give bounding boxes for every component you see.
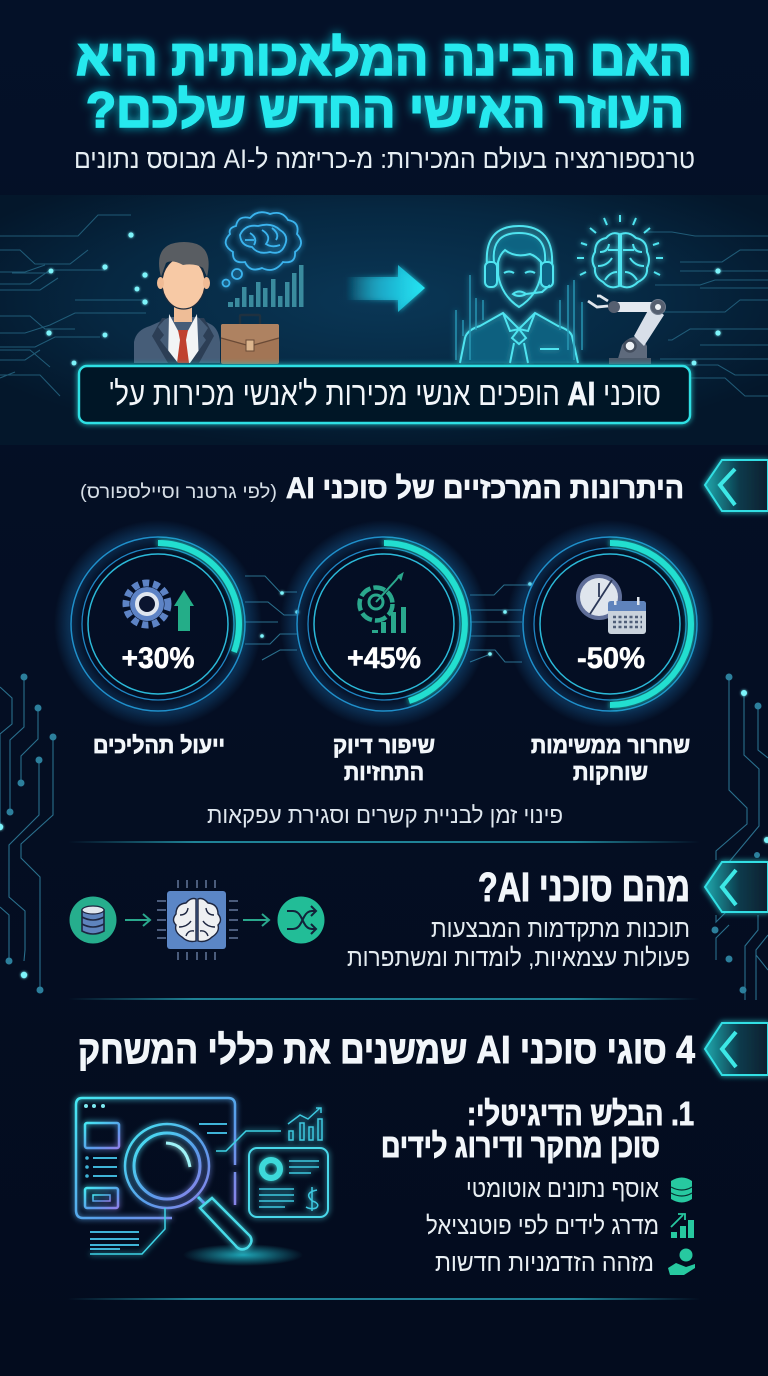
bullet: ranks leads by potential: מדרג לידים לפי פוטנציאל — [426, 1212, 659, 1240]
icon: gear with up arrow — [126, 583, 194, 631]
panel: hero transformation — [0, 195, 768, 445]
stat label: ייעול תהליכים — [93, 732, 225, 758]
callout: agents turn salespeople into super salespeople — [79, 366, 690, 423]
divider — [68, 1298, 700, 1300]
connectors between circles — [245, 576, 532, 662]
title — [76, 30, 692, 138]
panel: what are AI agents — [70, 862, 768, 972]
icon: clock and calendar — [576, 574, 646, 634]
icon: hexagon badge advantages — [705, 460, 768, 511]
heading: main advantages: היתרונות המרכזיים של סוכני AI — [286, 472, 684, 505]
icon: hexagon badge what — [705, 862, 768, 912]
panel: stat +30% process optimization — [54, 520, 262, 758]
heading: agent name — [381, 1095, 694, 1164]
heading: agent name: 1. הבלש הדיגיטלי: — [467, 1095, 694, 1132]
right circuit decoration — [712, 674, 768, 1000]
heading: main advantages: (לפי גרטנר וסיילספורס) — [80, 482, 277, 503]
gauge ring 45 — [280, 520, 488, 728]
callout: agents turn salespeople into super salespeople: סוכני AI הופכים אנשי מכירות ל'אנשי מכירות על' — [109, 375, 661, 412]
gauge ring 50 — [506, 520, 714, 728]
chart: thought bar chart — [228, 265, 304, 307]
icon: shuffle circle — [278, 896, 324, 944]
stat label — [531, 732, 690, 785]
heading: agent name: סוכן מחקר ודירוג לידים — [381, 1127, 660, 1164]
left circuit decoration — [0, 674, 57, 994]
divider — [68, 841, 700, 843]
gauge ring 30 — [54, 520, 262, 728]
stat label — [333, 732, 435, 785]
arrow: chip to shuffle — [243, 914, 269, 926]
illustration: magnifier over dashboard — [76, 1098, 328, 1266]
icon: database circle — [70, 896, 116, 944]
arrow: database to chip — [125, 914, 150, 926]
subtitle: טרנספורמציה בעולם המכירות: מ-כריזמה ל-AI מבוסס נתונים — [74, 144, 695, 174]
hero circuit lines — [0, 215, 768, 396]
icon: briefcase — [221, 315, 279, 364]
heading: מהם סוכני AI? — [478, 864, 690, 910]
title: העוזר האישי החדש שלכם? — [86, 82, 684, 138]
arrow: transformation — [346, 265, 425, 312]
description: פעולות עצמאיות, לומדות ומשתפרות — [347, 944, 690, 972]
icon: glowing brain — [577, 215, 663, 287]
stat value: +45% — [347, 642, 421, 675]
stat label: שחרור ממשימות — [531, 732, 690, 758]
description: תוכנות מתקדמות המבצעות — [431, 915, 690, 943]
icon: businessman — [134, 242, 220, 363]
divider — [68, 998, 700, 1000]
description — [347, 915, 690, 972]
panel: agent 1 digital detective — [76, 1095, 695, 1277]
icon: thought cloud brain — [222, 212, 301, 286]
title: האם הבינה המלאכותית היא — [76, 30, 692, 86]
icon: target and bars — [360, 573, 406, 633]
text: free up time caption: פינוי זמן לבניית קשרים וסגירת עפקאות — [207, 802, 563, 828]
panel: stat +45% forecast accuracy — [280, 520, 488, 785]
stat label: התחזיות — [344, 759, 424, 785]
stat label: שוחקות — [573, 759, 648, 785]
icon: holographic sales agent — [456, 226, 582, 363]
icon: robot arm — [588, 296, 666, 364]
panel: stat -50% free from tasks — [506, 520, 714, 785]
icon: hexagon badge types — [705, 1023, 768, 1075]
heading: main advantages — [80, 472, 684, 505]
heading: 4 types of AI agents: 4 סוגי סוכני AI שמשנים את כללי המשחק — [78, 1029, 695, 1072]
icon: chip brain — [157, 880, 238, 960]
stat value: -50% — [577, 642, 645, 675]
bullet: identifies new opportunities: מזהה הזדמניות חדשות — [435, 1249, 654, 1277]
stat value: +30% — [122, 642, 194, 675]
stat label: שיפור דיוק — [333, 732, 435, 758]
bullet: automatic data collection: אוסף נתונים אוטומטי — [466, 1175, 659, 1203]
